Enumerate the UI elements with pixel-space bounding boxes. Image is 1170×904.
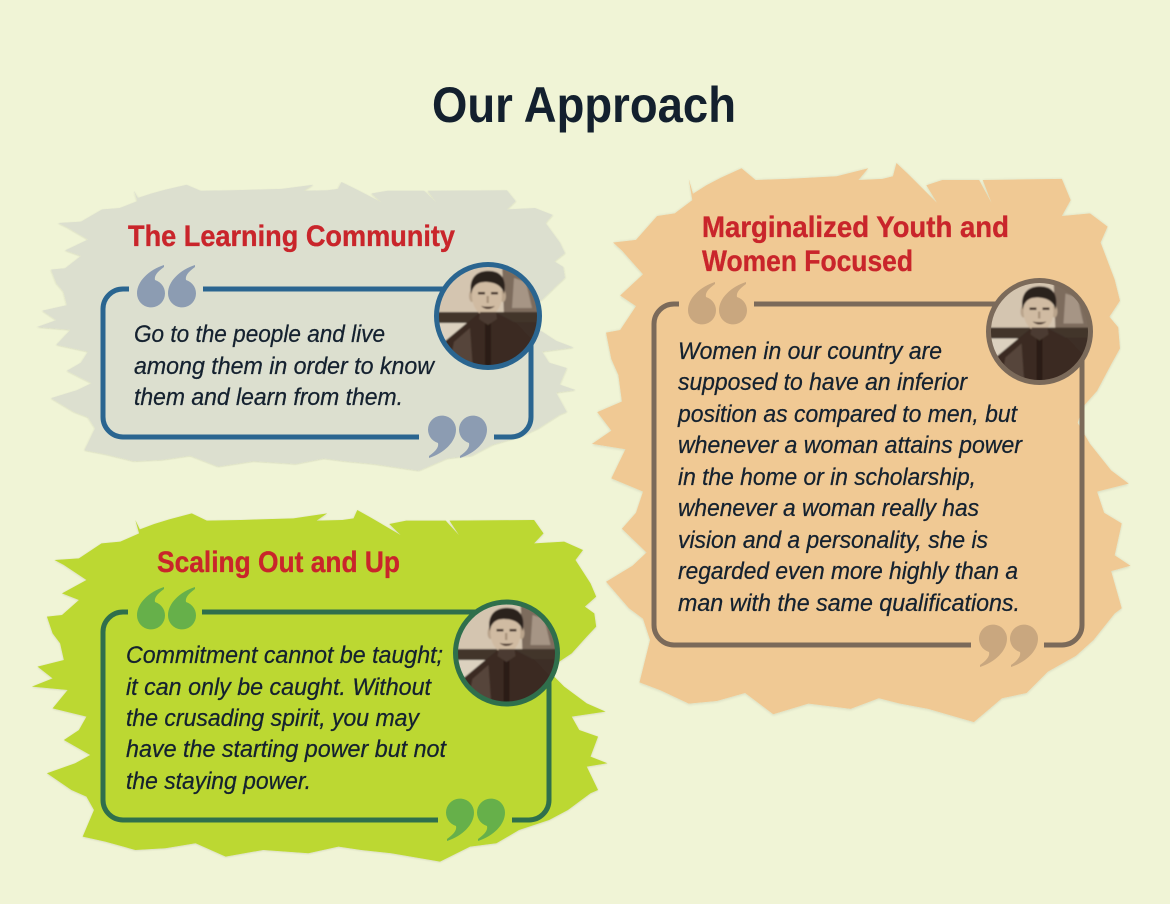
quote text bbox=[677, 338, 1023, 617]
portrait photo bbox=[433, 261, 543, 372]
quote text: supposed to have an inferior bbox=[678, 369, 968, 396]
icon: closing quote mark bbox=[979, 625, 1038, 667]
quote text: Commitment cannot be taught; bbox=[126, 642, 443, 669]
quote text bbox=[134, 321, 436, 411]
title: Our Approach bbox=[432, 77, 736, 133]
brush background: green bbox=[32, 510, 607, 862]
quote text: whenever a woman really has bbox=[678, 495, 979, 522]
quote text bbox=[126, 642, 447, 795]
quote text: Women in our country are bbox=[678, 338, 942, 365]
brush background: orange bbox=[592, 163, 1131, 722]
quote text: in the home or in scholarship, bbox=[678, 464, 976, 491]
quote text: among them in order to know bbox=[134, 353, 436, 380]
quote text: Go to the people and live bbox=[134, 321, 385, 348]
quote text: them and learn from them. bbox=[134, 384, 403, 411]
quote text: have the starting power but not bbox=[126, 736, 447, 763]
heading: scaling out and up: Scaling Out and Up bbox=[157, 546, 400, 579]
panel: marginalized youth and women focused bbox=[592, 163, 1131, 722]
quote frame bbox=[103, 612, 549, 820]
panel: the learning community bbox=[37, 182, 576, 471]
brush background: grey bbox=[37, 182, 576, 471]
quote text: position as compared to men, but bbox=[677, 401, 1018, 428]
quote text: the crusading spirit, you may bbox=[126, 705, 421, 732]
quote frame bbox=[103, 289, 531, 437]
icon: opening quote mark bbox=[137, 587, 196, 629]
portrait photo bbox=[984, 276, 1094, 388]
quote text: it can only be caught. Without bbox=[126, 674, 432, 701]
icon: closing quote mark bbox=[446, 799, 505, 841]
icon: closing quote mark bbox=[428, 416, 487, 458]
heading: marginalized youth and women focused: Marginalized Youth and bbox=[702, 211, 1009, 244]
quote text: whenever a woman attains power bbox=[678, 432, 1023, 459]
heading: marginalized youth and women focused: Women Focused bbox=[702, 245, 913, 278]
quote text: regarded even more highly than a bbox=[678, 558, 1018, 585]
icon: opening quote mark bbox=[688, 282, 747, 324]
quote text: man with the same qualifications. bbox=[678, 590, 1020, 617]
quote text: the staying power. bbox=[126, 768, 311, 795]
quote text: vision and a personality, she is bbox=[678, 527, 988, 554]
heading: the learning community: The Learning Community bbox=[128, 220, 455, 253]
icon: opening quote mark bbox=[137, 265, 196, 307]
heading: marginalized youth and women focused bbox=[702, 211, 1009, 278]
portrait photo bbox=[452, 598, 562, 709]
quote frame bbox=[654, 304, 1082, 645]
panel: scaling out and up bbox=[32, 510, 607, 862]
